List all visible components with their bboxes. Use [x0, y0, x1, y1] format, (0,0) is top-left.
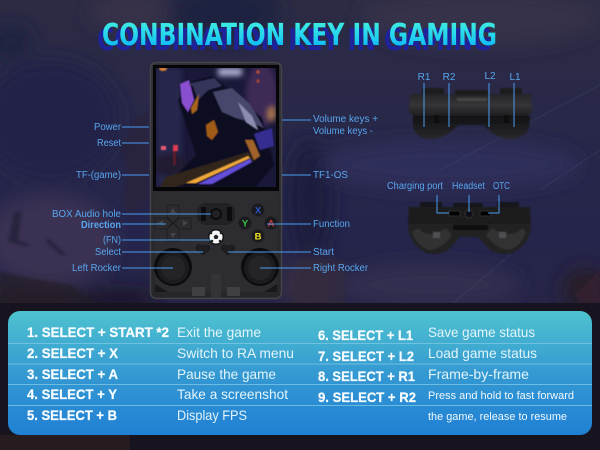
console top view with shoulder keys: [409, 88, 532, 139]
left callouts: BOX Audio hole: [52, 209, 121, 220]
speaker: [197, 203, 235, 225]
port callouts: Charging port: [387, 181, 443, 192]
left callouts: Reset: [97, 138, 121, 149]
shoulder key callouts: L1: [509, 72, 521, 83]
right callouts: [228, 114, 378, 274]
left column shortcuts: Pause the game: [177, 366, 276, 382]
right callouts: TF1-OS: [313, 170, 348, 181]
left column shortcuts: 4. SELECT + Y: [27, 386, 118, 402]
left rocker: [154, 248, 192, 286]
left callouts: Select: [95, 247, 121, 258]
face buttons X Y A B: [238, 204, 278, 242]
right rocker: [241, 248, 279, 286]
left callouts: (FN): [103, 235, 121, 246]
game screen artwork: [154, 63, 278, 187]
right column shortcuts: the game, release to resume: [428, 411, 567, 423]
left column shortcuts: 2. SELECT + X: [27, 345, 119, 361]
right callouts: Right Rocker: [313, 263, 369, 274]
port callouts: [387, 181, 510, 213]
port callouts: OTC: [493, 181, 510, 192]
left column shortcuts: 1. SELECT + START *2: [27, 324, 169, 340]
left column shortcuts: Take a screenshot: [177, 386, 288, 402]
shoulder key callouts: R2: [443, 72, 456, 83]
lower shell details: [192, 287, 240, 296]
face buttons X Y A B: B: [255, 232, 262, 242]
right callouts: Volume keys +: [313, 114, 378, 125]
FN soccer button: [208, 229, 224, 245]
right column shortcuts: 7. SELECT + L2: [318, 348, 414, 364]
left column shortcuts: 3. SELECT + A: [27, 366, 118, 382]
left column shortcuts: Exit the game: [177, 324, 261, 340]
handheld console, front view: [150, 62, 282, 299]
left column shortcuts: Display FPS: [177, 407, 247, 423]
left column shortcuts: [27, 324, 294, 423]
select and start heart buttons: [196, 245, 210, 255]
left callouts: Power: [94, 122, 122, 133]
port callouts: Headset: [452, 181, 485, 192]
left column shortcuts: 5. SELECT + B: [27, 407, 117, 423]
right column shortcuts: Load game status: [428, 345, 537, 361]
right callouts: Function: [313, 219, 350, 230]
right callouts: Start: [313, 247, 334, 258]
left callouts: Left Rocker: [72, 263, 122, 274]
face buttons X Y A B: Y: [242, 218, 249, 230]
shoulder key callouts: R1: [418, 72, 431, 83]
panel: combination key table: [8, 311, 592, 435]
right column shortcuts: 8. SELECT + R1: [318, 368, 415, 384]
left callouts: TF-(game): [76, 170, 121, 181]
d-pad: [155, 205, 191, 241]
face buttons X Y A B: A: [268, 218, 275, 230]
right callouts: Volume keys -: [313, 126, 373, 137]
console bottom view with ports: [408, 202, 531, 254]
left callouts: Direction: [81, 220, 121, 231]
title: CONBINATION KEY IN GAMING: [97, 23, 492, 58]
right column shortcuts: [318, 324, 574, 423]
right column shortcuts: Frame-by-frame: [428, 366, 529, 382]
left column shortcuts: Switch to RA menu: [177, 345, 294, 361]
shoulder key callouts: [418, 71, 521, 127]
right column shortcuts: 6. SELECT + L1: [318, 327, 413, 343]
face buttons X Y A B: X: [255, 206, 262, 216]
right column shortcuts: Save game status: [428, 324, 535, 340]
right column shortcuts: Press and hold to fast forward: [428, 390, 574, 402]
title: CONBINATION KEY IN GAMING: [102, 18, 497, 53]
shoulder key callouts: L2: [484, 71, 496, 82]
right column shortcuts: 9. SELECT + R2: [318, 389, 416, 405]
screen bezel: [153, 65, 279, 191]
left callouts: [52, 122, 211, 274]
